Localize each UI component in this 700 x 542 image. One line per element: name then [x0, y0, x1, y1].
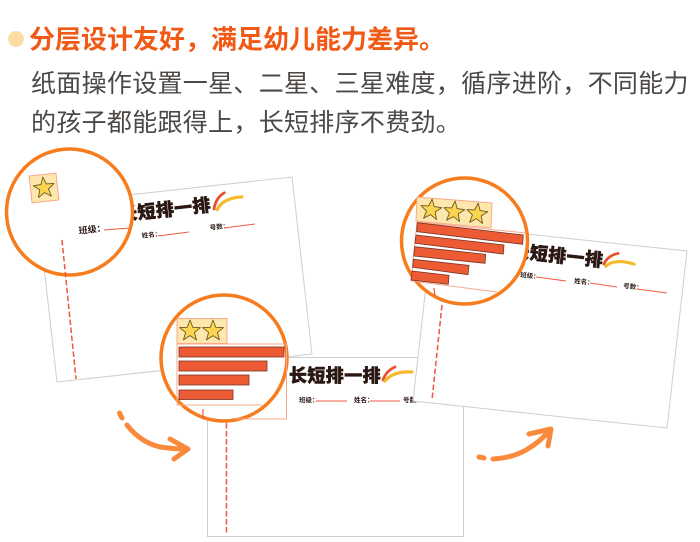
dashed cut line: [62, 240, 76, 379]
star badge: [416, 197, 492, 228]
number field: 号数：: [623, 281, 643, 292]
star badge: [29, 173, 59, 203]
name field: [354, 395, 400, 404]
dash tick: [434, 288, 435, 296]
dashed cut line: [432, 305, 442, 400]
bullet dot: [8, 31, 24, 47]
magnifier: two stars: [161, 295, 287, 421]
name field: 姓名：: [141, 229, 162, 240]
worksheet: two stars: [208, 358, 464, 536]
name field: [574, 276, 617, 287]
magnifier: three stars: [402, 178, 528, 304]
worksheet title: 长短排一排: [511, 240, 604, 271]
class field enlarged: [78, 222, 129, 236]
arrow: one star to two stars: [120, 413, 188, 459]
star badge: [177, 318, 227, 344]
worksheet: one star: [37, 177, 312, 382]
worksheet: three stars: [413, 224, 687, 428]
title swoosh: [604, 252, 635, 269]
dashed cut line: [226, 423, 228, 535]
class field: [520, 270, 566, 281]
arrow: two stars to three stars: [479, 429, 551, 459]
body text: 纸面操作设置一星、二星、三星难度，循序进阶，不同能力: [31, 70, 689, 98]
worksheet title: 长短排一排: [118, 194, 212, 225]
length bars: [179, 347, 284, 400]
class field: 班级：: [520, 270, 540, 281]
answer frame: [411, 222, 526, 292]
class field enlarged: 班级：: [78, 222, 106, 236]
body text: [31, 70, 689, 137]
name field: 姓名：: [354, 395, 374, 404]
dash tick: [202, 409, 204, 419]
body text: 的孩子都能跟得上，长短排序不费劲。: [31, 109, 461, 137]
title swoosh: [212, 191, 243, 210]
worksheet title: 长短排一排: [289, 365, 381, 386]
number field: 号数：: [403, 395, 422, 404]
heading: 分层设计友好，满足幼儿能力差异。: [29, 24, 445, 54]
number field: [209, 221, 255, 232]
title swoosh: [383, 367, 412, 381]
number field: [623, 281, 667, 293]
length bars: [411, 223, 523, 284]
class field: 班级：: [299, 395, 318, 404]
class field: [299, 395, 347, 404]
name field: [141, 229, 189, 240]
answer frame: [177, 344, 286, 419]
name field: 姓名：: [574, 276, 594, 287]
number field: 号数：: [209, 221, 230, 232]
magnifier: one star: [6, 149, 132, 379]
